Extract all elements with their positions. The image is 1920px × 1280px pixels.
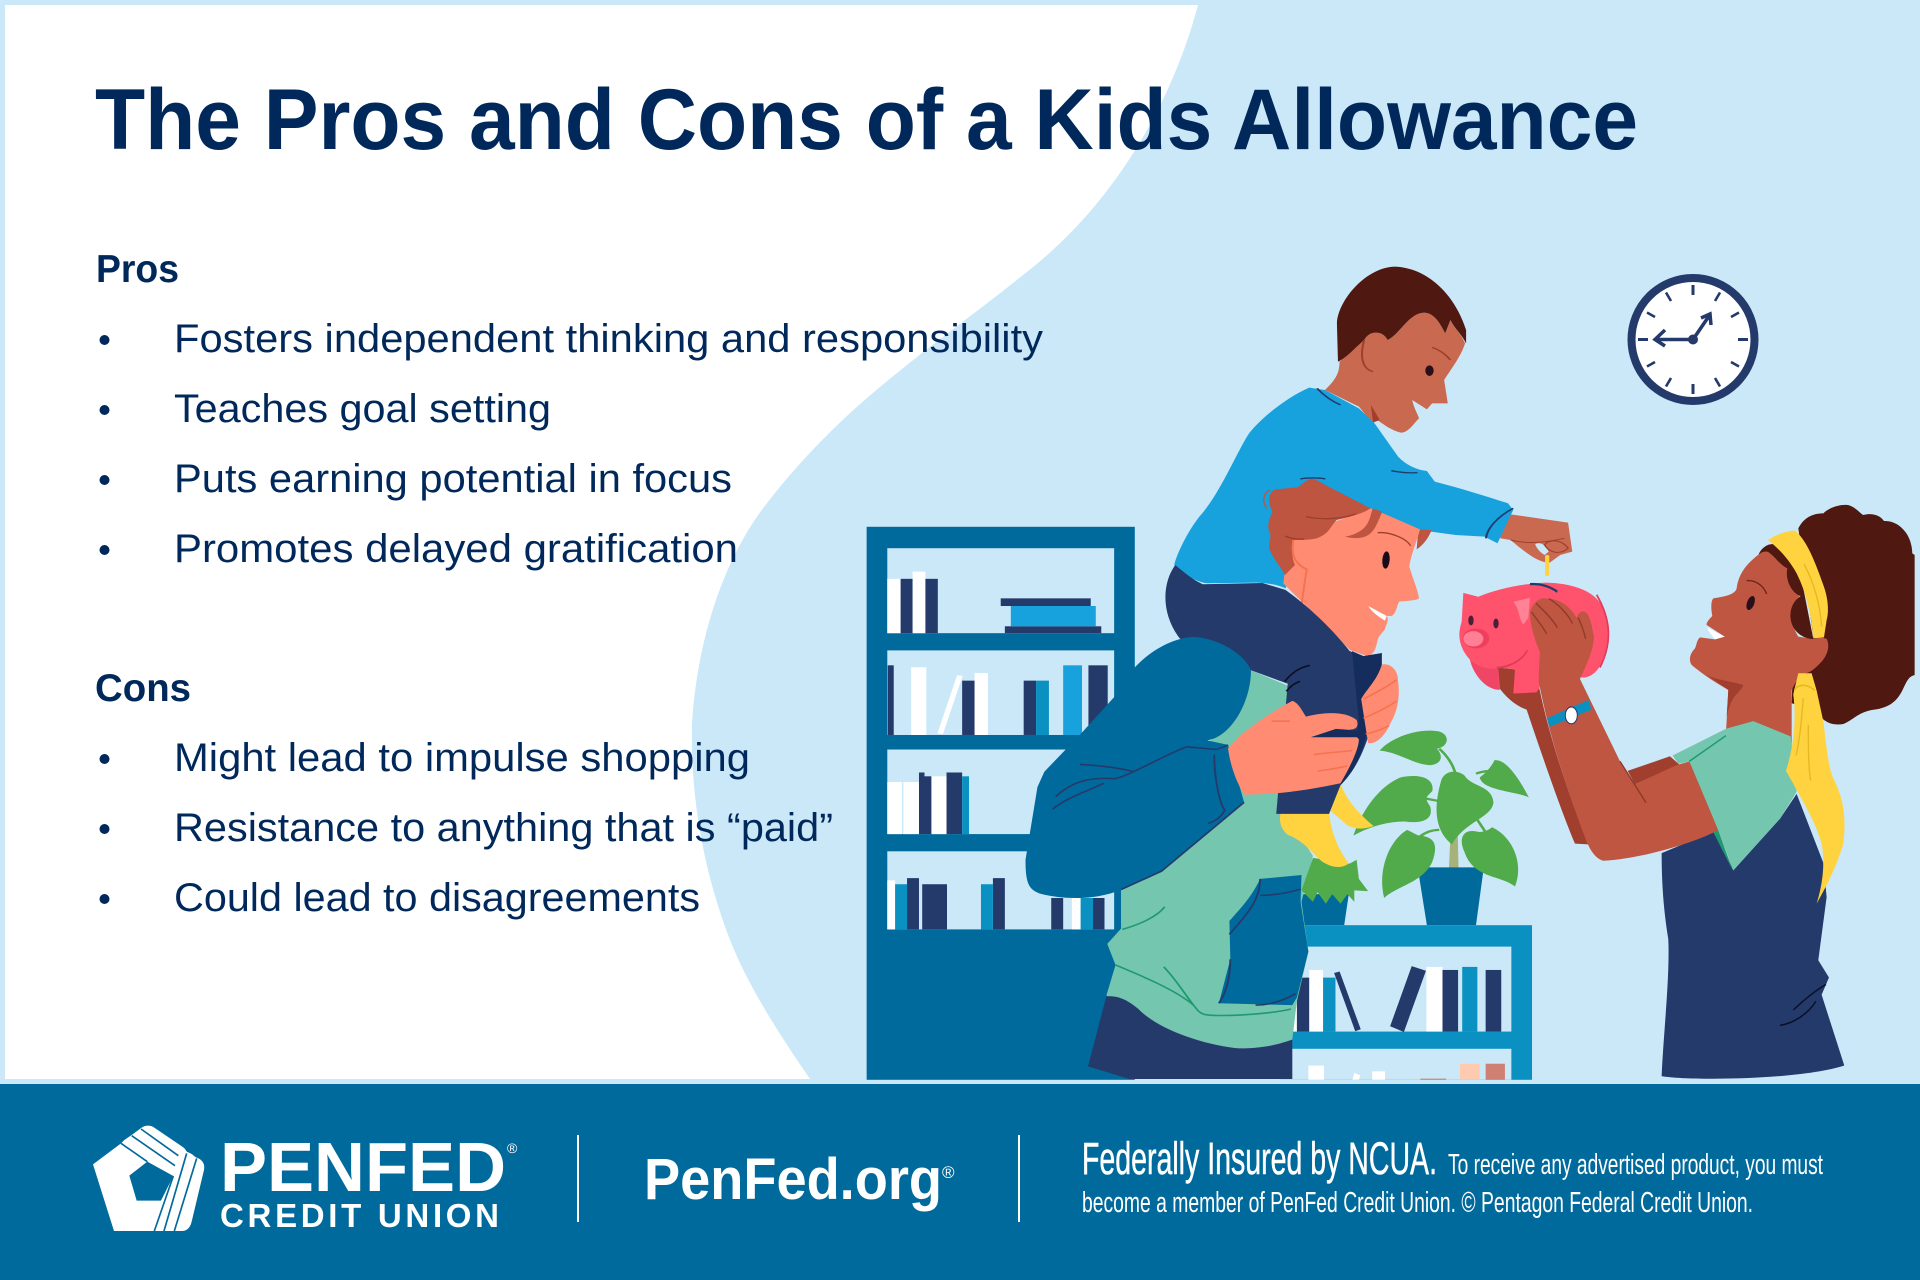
cons item 2: Resistance to anything that is “paid” [174, 806, 833, 850]
pros item 3: Puts earning potential in focus [174, 457, 732, 501]
mother: scarf ponytail [1786, 673, 1845, 904]
title: The Pros and Cons of a Kids Allowance [95, 72, 1638, 168]
pros item 2: Teaches goal setting [174, 387, 551, 431]
mother: back arm [1498, 668, 1680, 844]
boy: legs [1165, 565, 1382, 814]
low shelf with books [1281, 925, 1532, 1080]
illustration: family scene [867, 267, 1915, 1080]
mother: front arm and hand [1530, 598, 1718, 861]
father: head [1264, 479, 1432, 656]
pros item 4: Promotes delayed gratification [174, 527, 738, 571]
panel: pros list [96, 248, 1043, 571]
mother: hair and head [1690, 505, 1915, 750]
cons item 1: Might lead to impulse shopping [174, 736, 750, 780]
potted plants [1301, 731, 1529, 925]
father: hoodie and pants [1088, 670, 1313, 1079]
pros item 1: Fosters independent thinking and responsibility [174, 317, 1043, 361]
disclaimer text [1082, 1133, 1823, 1219]
footer band [0, 1084, 1920, 1280]
father: sleeve [1026, 637, 1251, 898]
mother [1459, 505, 1915, 1079]
boy: socks [1280, 783, 1374, 867]
white background panel with curved edge [5, 5, 1198, 1079]
cons item 3: Could lead to disagreements [174, 876, 700, 920]
mother: shirt [1662, 794, 1844, 1079]
website: PenFed.org [644, 1147, 942, 1212]
grass sprig [1301, 858, 1368, 904]
heading: cons: Cons [95, 667, 191, 710]
father: hands [1228, 664, 1399, 795]
logo: PenFed pentagon mark [93, 1126, 204, 1231]
tall bookshelf [867, 527, 1135, 1080]
clock [1632, 278, 1754, 401]
heading: pros: Pros [96, 248, 179, 291]
logo wordmark: PENFED: PENFED [220, 1128, 506, 1206]
boy: torso and head [1174, 267, 1572, 588]
piggy bank [1459, 583, 1609, 694]
panel: cons list [95, 667, 833, 920]
logo wordmark: credit union: CREDIT UNION [220, 1197, 499, 1234]
disclaimer text: Federally Insured by NCUA. [1082, 1133, 1437, 1184]
website: ® [942, 1163, 955, 1182]
mother: sleeve [1673, 721, 1797, 870]
logo wordmark: PENFED: ® [507, 1140, 518, 1156]
